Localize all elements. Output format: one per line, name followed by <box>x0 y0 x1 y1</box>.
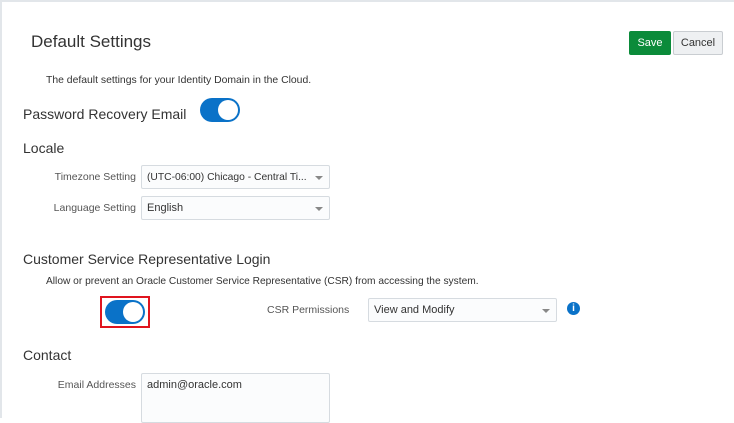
CSR description: Allow or prevent an Oracle Customer Service Representative (CSR) from accessing the system. <box>46 276 479 287</box>
label: timezone: Timezone Setting <box>55 171 136 183</box>
heading: locale: Locale <box>23 140 64 156</box>
icon: info: i <box>572 303 575 314</box>
textarea: email <box>141 373 330 423</box>
button: save: Save <box>637 37 663 49</box>
icon: info <box>567 302 580 315</box>
highlighted CSR toggle <box>100 296 150 328</box>
textarea: email: admin@oracle.com <box>147 379 242 391</box>
description: The default settings for your Identity Domain in the Cloud. <box>46 75 311 86</box>
heading: password recovery email: Password Recovery Email <box>23 106 186 122</box>
button: cancel <box>673 31 723 55</box>
select: CSR permissions <box>368 298 557 322</box>
select: language <box>141 196 330 220</box>
button: save <box>629 31 671 55</box>
label: email addresses: Email Addresses <box>58 379 136 391</box>
label: language: Language Setting <box>54 202 136 214</box>
heading: contact: Contact <box>23 347 71 363</box>
title: Default Settings <box>31 32 151 51</box>
toggle: CSR <box>105 300 145 324</box>
select: language: English <box>147 202 183 214</box>
toggle: password recovery <box>200 98 240 122</box>
select: CSR permissions: View and Modify <box>374 304 455 316</box>
heading: CSR login: Customer Service Representative Login <box>23 251 270 267</box>
select: timezone: (UTC-06:00) Chicago - Central Ti... <box>147 172 307 183</box>
label: CSR permissions: CSR Permissions <box>267 304 349 316</box>
button: cancel: Cancel <box>681 37 715 49</box>
select: timezone <box>141 165 330 189</box>
